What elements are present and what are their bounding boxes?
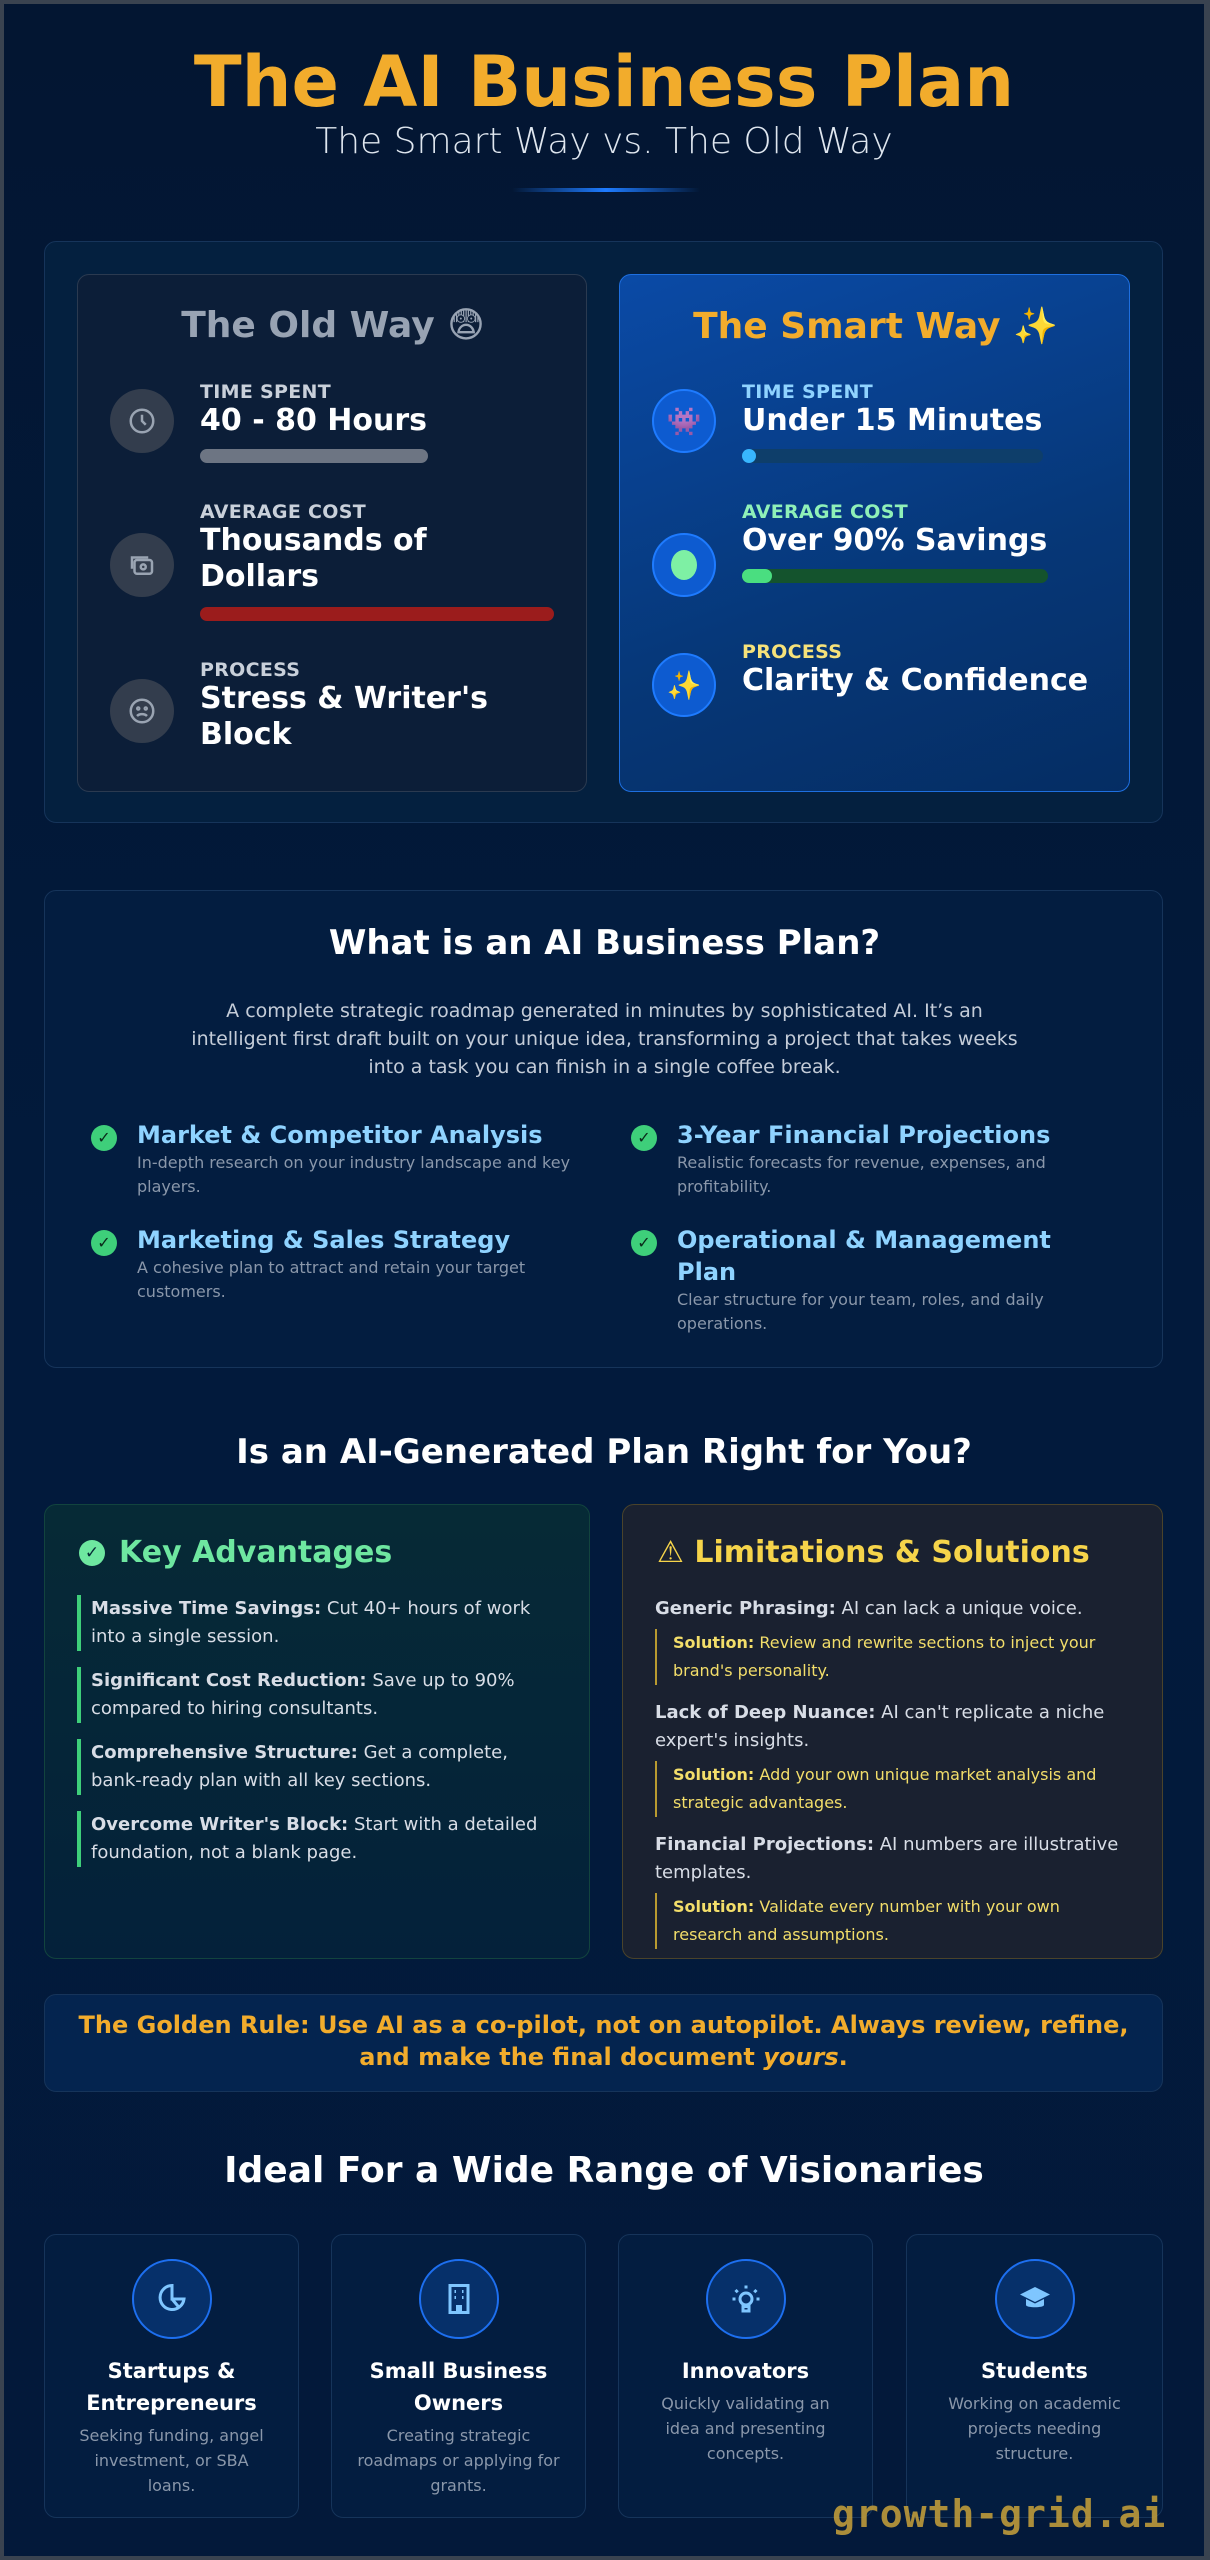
list: limitations: Generic Phrasing: AI can lack a unique voice. (655, 1598, 1083, 1619)
card: innovators: Quickly validating an idea and presenting concepts. (661, 2394, 830, 2463)
row: process: Clarity & Confidence (742, 663, 1088, 698)
row: time: Under 15 Minutes (742, 403, 1042, 438)
row: process: PROCESS (742, 641, 842, 663)
row: process (742, 641, 1088, 698)
row: time spent (200, 381, 428, 463)
card: students (906, 2234, 1163, 2518)
heading: old way: The Old Way 😨 (181, 305, 485, 346)
intro text: A complete strategic roadmap generated in minutes by sophisticated AI. It’s an intelligent first draft built on your unique idea, transforming a project that takes weeks into a task you can finish in a single coffee break. (191, 1000, 1018, 1078)
list: advantages: Significant Cost Reduction: Save up to 90% compared to hiring consultants. (91, 1670, 515, 1719)
row: average cost: Thousands of (200, 523, 427, 558)
list: advantages (77, 1595, 537, 1867)
icon: graduation cap (994, 2259, 1074, 2339)
card: startups: Startups & (108, 2359, 235, 2383)
icon: building (418, 2259, 498, 2339)
callout: golden rule: The Golden Rule: Use AI as a co-pilot, not on autopilot. Always review, refine, (79, 2011, 1128, 2039)
panel: what is (44, 890, 1163, 1368)
feature: financial: 3-Year Financial Projections (677, 1121, 1050, 1149)
card: startups (44, 2234, 299, 2518)
feature: market (91, 1121, 570, 1196)
card: students: Working on academic projects needing structure. (948, 2394, 1121, 2463)
feature: financial (631, 1121, 1050, 1196)
card: startups: Seeking funding, angel investment, or SBA loans. (79, 2426, 264, 2495)
icon: sad face (110, 679, 174, 743)
card: innovators (618, 2234, 873, 2518)
panel: what is: ✓ (97, 1128, 111, 1147)
row: average cost: Dollars (200, 559, 319, 594)
feature: financial: Realistic forecasts for revenue, expenses, and profitability. (677, 1153, 1046, 1196)
row: process: Block (200, 717, 292, 752)
list: limitations (655, 1598, 1118, 1949)
row: process: PROCESS (200, 659, 300, 681)
icon: bulb (706, 2259, 786, 2339)
panel: smart way (619, 274, 1130, 792)
feature: market: Market & Competitor Analysis (137, 1121, 543, 1149)
feature: marketing: A cohesive plan to attract and retain your target customers. (137, 1258, 525, 1301)
card: small business: Owners (414, 2391, 503, 2415)
icon: money (110, 533, 174, 597)
icon: clock (110, 389, 174, 453)
card: startups: Entrepreneurs (86, 2391, 257, 2415)
row: process (200, 659, 488, 752)
feature: marketing: Marketing & Sales Strategy (137, 1226, 510, 1254)
row: cost: AVERAGE COST (742, 501, 908, 523)
heading: What is an AI Business Plan? (329, 923, 880, 963)
watermark: growth-grid.ai (832, 2492, 1166, 2536)
icon: rocket (132, 2259, 212, 2339)
heading: advantages: ✓ (85, 1542, 99, 1562)
list: advantages: Comprehensive Structure: Get a complete, bank-ready plan with all key sections. (91, 1742, 508, 1791)
heading: advantages: Key Advantages (119, 1535, 392, 1570)
list: limitations: Financial Projections: AI numbers are illustrative templates. (655, 1834, 1118, 1883)
list: limitations: Lack of Deep Nuance: AI can't replicate a niche expert's insights. (655, 1702, 1104, 1751)
card: small business (331, 2234, 586, 2518)
icon: sparkles: ✨ (667, 668, 701, 702)
list: limitations: Solution: Add your own unique market analysis and strategic advantages. (673, 1765, 1096, 1812)
row: cost (742, 501, 1048, 583)
callout: golden rule (44, 1994, 1163, 2092)
feature: marketing (91, 1226, 525, 1301)
row: time (742, 381, 1043, 463)
row: cost: Over 90% Savings (742, 523, 1047, 558)
card: small business: Creating strategic roadmaps or applying for grants. (357, 2426, 560, 2495)
icon: sparkles (652, 653, 716, 717)
row: time: TIME SPENT (742, 381, 873, 403)
row: time spent: 40 - 80 Hours (200, 403, 427, 438)
panel: advantages (44, 1504, 590, 1959)
card: students: Students (981, 2359, 1088, 2383)
list: limitations: Solution: Validate every number with your own research and assumptions. (673, 1897, 1060, 1944)
panel: what is: ✓ (637, 1128, 651, 1147)
icon: robot: 👾 (667, 404, 701, 438)
card: innovators: Innovators (682, 2359, 809, 2383)
panel: limitations (622, 1504, 1163, 1959)
feature: operational: Clear structure for your team, roles, and daily operations. (677, 1290, 1044, 1333)
panel: what is: ✓ (97, 1233, 111, 1252)
row: process: Stress & Writer's (200, 681, 488, 716)
feature: operational (631, 1226, 1051, 1333)
feature: market: In-depth research on your industry landscape and key players. (137, 1153, 570, 1196)
icon: robot (652, 389, 716, 453)
panel: comparison (44, 241, 1163, 823)
card: small business: Small Business (370, 2359, 547, 2383)
row: time spent: TIME SPENT (200, 381, 331, 403)
row: average cost (200, 501, 554, 621)
heading: limitations: ⚠ Limitations & Solutions (657, 1535, 1090, 1570)
heading: visionaries: Ideal For a Wide Range of Visionaries (224, 2150, 984, 2191)
heading: right for you: Is an AI-Generated Plan Right for You? (236, 1432, 972, 1472)
callout: golden rule: and make the final document yours. (359, 2043, 848, 2071)
panel: what is: ✓ (637, 1233, 651, 1252)
list: advantages: Overcome Writer's Block: Start with a detailed foundation, not a blank page. (91, 1814, 537, 1863)
list: advantages: Massive Time Savings: Cut 40+ hours of work into a single session. (91, 1598, 530, 1647)
panel: old way (77, 274, 587, 792)
row: average cost: AVERAGE COST (200, 501, 366, 523)
subtitle: The Smart Way vs. The Old Way (315, 121, 893, 162)
heading: smart way: The Smart Way ✨ (693, 306, 1058, 347)
title: The AI Business Plan (194, 41, 1014, 123)
feature: operational: Operational & Management Plan (677, 1226, 1051, 1286)
list: limitations: Solution: Review and rewrite sections to inject your brand's personality. (673, 1633, 1095, 1680)
icon: coin (652, 533, 716, 597)
